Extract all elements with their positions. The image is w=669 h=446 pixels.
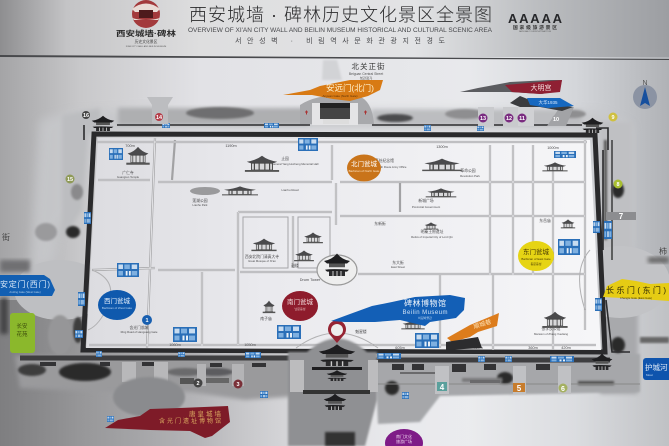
wall buildings [40,362,550,384]
map labels: 广仁寺 [122,170,134,175]
map labels: 魁星楼 [355,329,367,334]
callout: beilin museum blue brush: 碑林博物馆 [404,298,446,308]
number badges: 2 [196,381,200,387]
callout: north gate barbican: Barbican of North Gate [349,169,380,173]
landmark buildings [126,147,575,329]
number badges: 1 [145,318,149,324]
map labels: 莲湖公园 [192,198,208,203]
callout: beilin museum blue brush: 비림박물관 [418,315,432,320]
callout: west gate barbican: Barbican of West Gate [102,306,132,310]
north gate complex [300,95,374,125]
gate stubs and numbered markers [122,97,636,394]
map labels: General Yang Hucheng Memorial Hall [272,162,319,166]
callout: east gate barbican [518,241,554,271]
map labels: 750m [473,346,483,350]
edge road labels [2,232,667,256]
callout: east gate yellow brush: Changle Gate (East Gate) [620,296,652,300]
map labels: 1300m [436,145,448,149]
edge road labels: 柿 [659,246,667,256]
callout: north gate orange brush [283,80,383,101]
callout: beilin museum blue brush: Beilin Museum [402,310,448,316]
map labels [117,144,571,350]
number badges: 15 [67,177,73,183]
callout: east gate barbican: 동문옹성 [530,261,542,266]
callout: south gate barbican: 南门瓮城 [287,297,314,306]
callout: west gate blue label [0,275,55,296]
callout: daming palace red brush [460,80,562,94]
south gate complex [288,338,378,446]
AAAAA rating: 国家级旅游景区 [513,24,557,31]
callout: east gate yellow brush: 长乐门(东门) [606,285,666,295]
number badges: 6 [561,386,565,393]
callout: east gate barbican: Barbican of East Gate [521,257,551,261]
number badges: 12 [506,116,512,122]
map labels: Mansion of Zhang Xueliang [534,332,568,336]
number badges: 10 [553,117,559,123]
callout: blue brush [510,96,574,111]
map labels: Revolution Park [460,174,480,178]
edge road labels: 街 [2,232,10,242]
map labels: 605m [395,346,405,350]
logo: 历史文化景区 [135,39,158,44]
map labels: Lianhu Park [193,203,208,207]
map labels: Drum Tower [300,278,321,282]
number badges: 14 [156,115,163,121]
map labels: 张学良公馆 [542,326,561,331]
callout: west gate blue label: Anding Gate (West Gate) [9,290,41,294]
map labels: 东大街 [392,260,404,265]
number badges: 11 [519,116,525,122]
callout: east gate barbican: 东门瓮城 [523,247,550,256]
callout: tang city wall red brush [105,406,230,438]
callout: blue brush: 大华1935 [538,99,558,106]
compass [633,80,657,109]
number badges: 13 [480,116,486,122]
location pin [328,320,346,343]
callout: north gate orange brush: Anyuan Gate (North Gate) [322,94,358,98]
map labels: 鼓楼 [291,263,299,268]
map labels: 明秦王府遗址 [421,229,444,234]
map labels: 1050m [244,343,256,347]
map labels: 1000m [547,146,559,150]
map labels: 1190m [225,144,237,148]
callout: green label: 长安 [16,322,28,330]
map labels: 八路军西安办事处纪念馆 [352,158,394,163]
bell tower [317,254,357,285]
callout: moat blue box: 护城河 [645,362,668,372]
road grid [88,138,596,350]
map labels: 南子庙 [260,316,272,321]
number badges: 8 [616,182,620,188]
map labels: 革命公园 [460,168,476,173]
map labels: Ring Road of Hanguang Gate [121,330,158,334]
logo: 西安城墙·碑林 [116,28,177,38]
title: 西安城墙 · 碑林历史文化景区全景图 [189,5,492,25]
callout: tang city wall red brush: 含光门遗址博物馆 [159,417,221,425]
city map base [86,138,601,350]
map labels: 420m [561,346,571,350]
korean subtitle: 서안성벽 · 비림역사문화관광지전경도 [235,36,446,45]
map labels: Guangren Temple [117,175,140,179]
map labels: 西安北院门清真大寺 [245,254,279,259]
callout: west gate barbican [98,290,136,320]
callout: west gate barbican: 西门瓮城 [104,296,130,305]
map labels: Great Mosque of Xi'an [248,259,276,263]
number badges [66,111,624,393]
map labels: 东岳庙 [539,218,551,223]
scenic landscape around the wall [0,108,669,424]
map labels: 360m [528,346,538,350]
callout: green label: 花苑 [16,330,28,338]
logo [116,0,177,48]
number badges: 3 [236,382,240,388]
callout: city wall lane orange brush [446,313,499,350]
trees and ink wash [18,107,625,395]
north road label: 北关正街 [352,61,385,71]
callout: purple circle: 旅游广场 [396,438,412,444]
callout: south gate barbican [282,291,318,321]
map labels: Provincial Government [412,205,440,209]
callout: purple circle: 南门文化 [396,433,412,439]
number badges: 7 [619,212,624,221]
callout: west gate blue label: 安定门(西门) [0,279,50,289]
callout: tang city wall mound [113,377,185,417]
map labels: Lianhu Road [281,188,299,192]
north road label [322,60,385,80]
map labels: East Street [391,265,405,269]
AAAAA rating [508,11,563,33]
number badges: 4 [440,383,445,392]
callout: north gate orange brush: 安远门(北门) [326,83,374,93]
north road label: 북관정가 [360,76,372,80]
callout: city wall lane orange brush: 顺城巷 [473,318,492,331]
callout: moat blue box [643,358,669,380]
outer wall [20,125,640,384]
callout: north gate barbican [347,154,381,182]
map labels: 止园 [281,156,289,161]
map labels: The Eighth Route Army Office [370,165,407,169]
map labels: 含光门翁城 [130,325,149,330]
callout: east gate yellow brush [603,279,669,301]
english subtitle: OVERVIEW OF XI'AN CITY WALL AND BEILIN MUSEUM HISTORICAL AND CULTURAL SCENIC AREA [188,27,492,34]
callout: moat blue box: Moat [646,373,653,377]
callout: beilin museum blue brush [331,295,465,326]
callout: green label [10,313,35,353]
callout: north gate barbican: 北门瓮城 [351,159,378,168]
number badges: 16 [83,113,89,119]
number badges: 5 [517,384,522,393]
callout: south gate barbican: 남문옹성 [294,306,306,311]
callout: purple circle [385,429,423,446]
header band [0,0,669,60]
map labels: 1060m [169,343,181,347]
AAAAA rating: NATIONAL TOURIST ATTRACTION [519,30,552,33]
corner towers [92,116,612,370]
compass: N [642,80,648,87]
logo: XI'AN CITY WALL AND BEILIN MUSEUM [126,45,166,48]
callout: daming palace red brush: 大明宫 [530,83,552,92]
AAAAA rating: AAAAA [508,11,563,26]
map labels: 东新街 [374,221,386,226]
map labels: Relics of Imperial City of Lord Qin [411,235,453,239]
map labels: 700m [125,144,135,148]
north road label: Beiguan Central Street [349,72,383,76]
number badges: 9 [611,115,615,121]
icon groups: facilities [75,123,612,437]
map labels: 新城广场 [418,198,434,203]
callout: tang city wall red brush: 唐皇城墙 [189,409,222,418]
